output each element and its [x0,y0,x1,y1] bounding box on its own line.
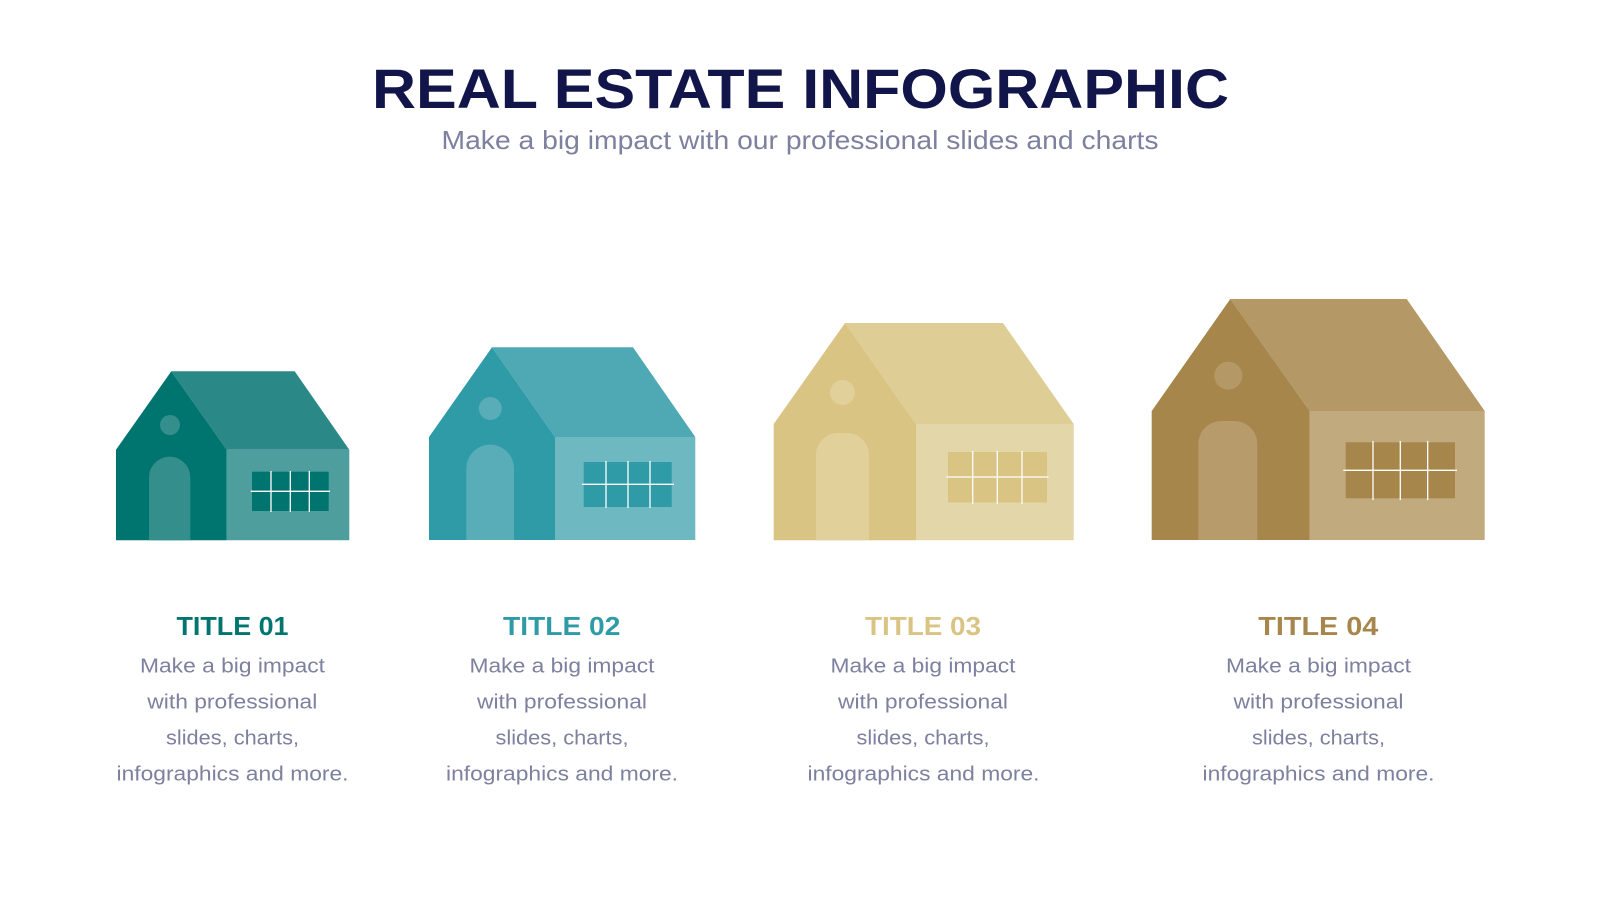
heading 3: TITLE 03 [865,611,981,641]
body 2 [446,654,678,785]
column text 2 [446,611,678,785]
body 4: slides, charts, [1252,726,1385,749]
body 4: with professional [1232,690,1404,713]
column text 4 [1202,611,1434,785]
body 1: slides, charts, [166,726,299,749]
column text 1 [116,611,348,785]
house 2 [429,347,695,540]
body 3: Make a big impact [830,654,1016,677]
body 3: slides, charts, [856,726,990,749]
body 2: slides, charts, [496,726,628,749]
body 2: infographics and more. [446,762,678,785]
title: REAL ESTATE INFOGRAPHIC [372,58,1229,120]
body 2: with professional [476,690,647,713]
header [372,58,1229,155]
subtitle: Make a big impact with our professional slides and charts [442,125,1158,155]
body 3: with professional [837,690,1008,713]
body 3 [808,654,1040,785]
heading 1: TITLE 01 [176,611,288,641]
body 1: Make a big impact [140,654,325,677]
body 2: Make a big impact [470,654,655,677]
body 1: infographics and more. [116,762,348,785]
body 4 [1202,654,1434,785]
body 4: infographics and more. [1202,762,1434,785]
house 4 [1152,299,1485,540]
body 3: infographics and more. [808,762,1040,785]
body 4: Make a big impact [1226,654,1411,677]
body 1: with professional [146,690,317,713]
column text 3 [808,611,1040,785]
body 1 [116,654,348,785]
house 3 [774,323,1074,540]
house 1 [116,371,349,540]
heading 4: TITLE 04 [1258,611,1379,641]
heading 2: TITLE 02 [503,611,620,641]
